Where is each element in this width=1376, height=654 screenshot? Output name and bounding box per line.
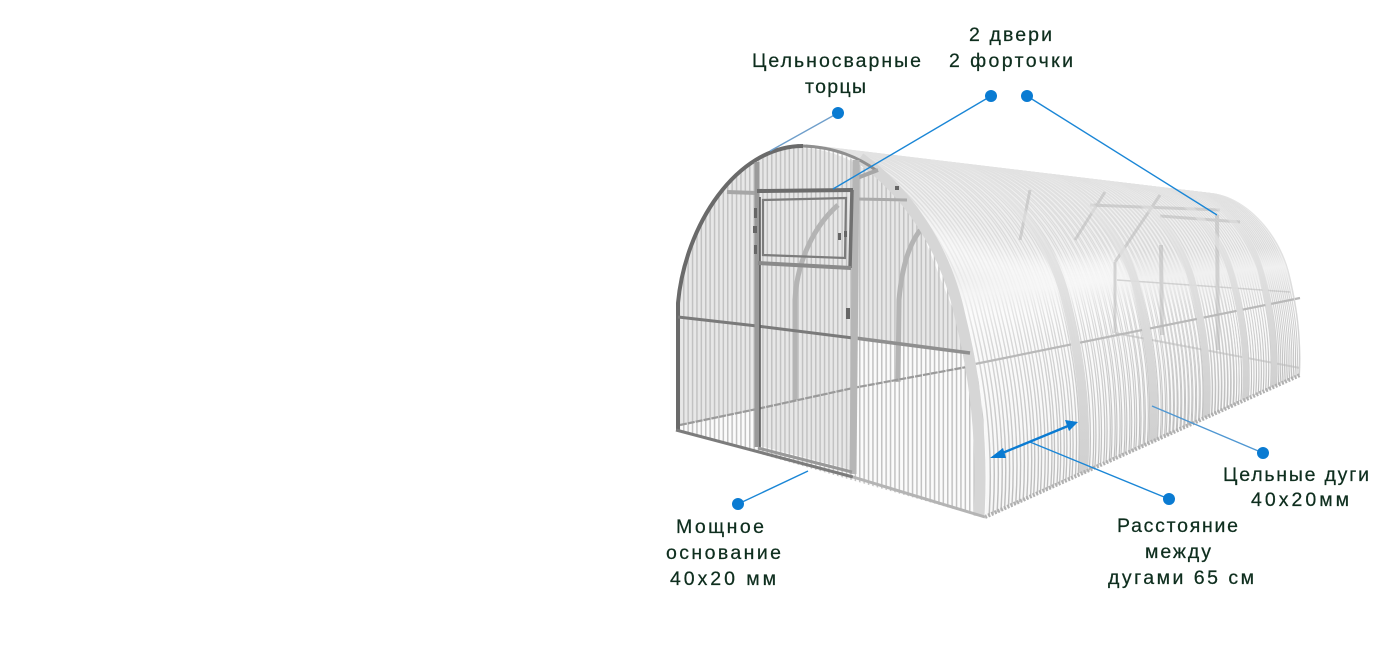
side base rail	[985, 375, 1300, 517]
callout: цельносварные торцы: Цельносварные	[752, 50, 921, 72]
greenhouse illustration	[676, 144, 1301, 518]
bottom front rail	[676, 430, 853, 477]
door and window frame	[757, 160, 856, 474]
callout: цельные дуги: 40х20мм	[1251, 489, 1349, 511]
callout: мощное основание: Мощное	[676, 516, 764, 538]
callout: расстояние между дугами: Расстояние	[1117, 515, 1238, 537]
roof highlight	[905, 225, 1125, 274]
arrow: distance between arches	[990, 420, 1078, 458]
side polycarbonate ribs	[809, 145, 1299, 516]
callout: мощное основание: основание	[666, 542, 781, 564]
inner arches seen through front	[795, 205, 924, 400]
front arch silver right	[860, 158, 980, 516]
callout: расстояние между дугами	[1030, 442, 1254, 589]
door hardware	[753, 186, 899, 319]
back base line	[680, 366, 972, 425]
callout: цельносварные торцы	[752, 50, 921, 151]
callout: мощное основание	[666, 471, 808, 590]
callout: цельносварные торцы: торцы	[805, 76, 866, 98]
front end face	[676, 144, 986, 518]
end-face cross bars	[678, 170, 970, 353]
side roof surface	[803, 144, 1300, 518]
callout: 2 двери 2 форточки	[833, 24, 1217, 215]
callout: цельные дуги: Цельные дуги	[1223, 464, 1369, 486]
callout: цельные дуги	[1152, 406, 1369, 511]
callout: расстояние между дугами: дугами 65 см	[1108, 567, 1254, 589]
callout: 2 двери 2 форточки: 2 форточки	[949, 50, 1073, 72]
callout: мощное основание: 40х20 мм	[670, 568, 776, 590]
far-side frame seen through the roof	[1020, 190, 1300, 368]
side stringer	[975, 298, 1300, 364]
side arches	[1022, 204, 1300, 474]
front upper glazing shade	[680, 148, 970, 470]
callout: 2 двери 2 форточки: 2 двери	[969, 24, 1052, 46]
front arch dark left	[678, 146, 877, 430]
callout: расстояние между дугами: между	[1145, 541, 1211, 563]
